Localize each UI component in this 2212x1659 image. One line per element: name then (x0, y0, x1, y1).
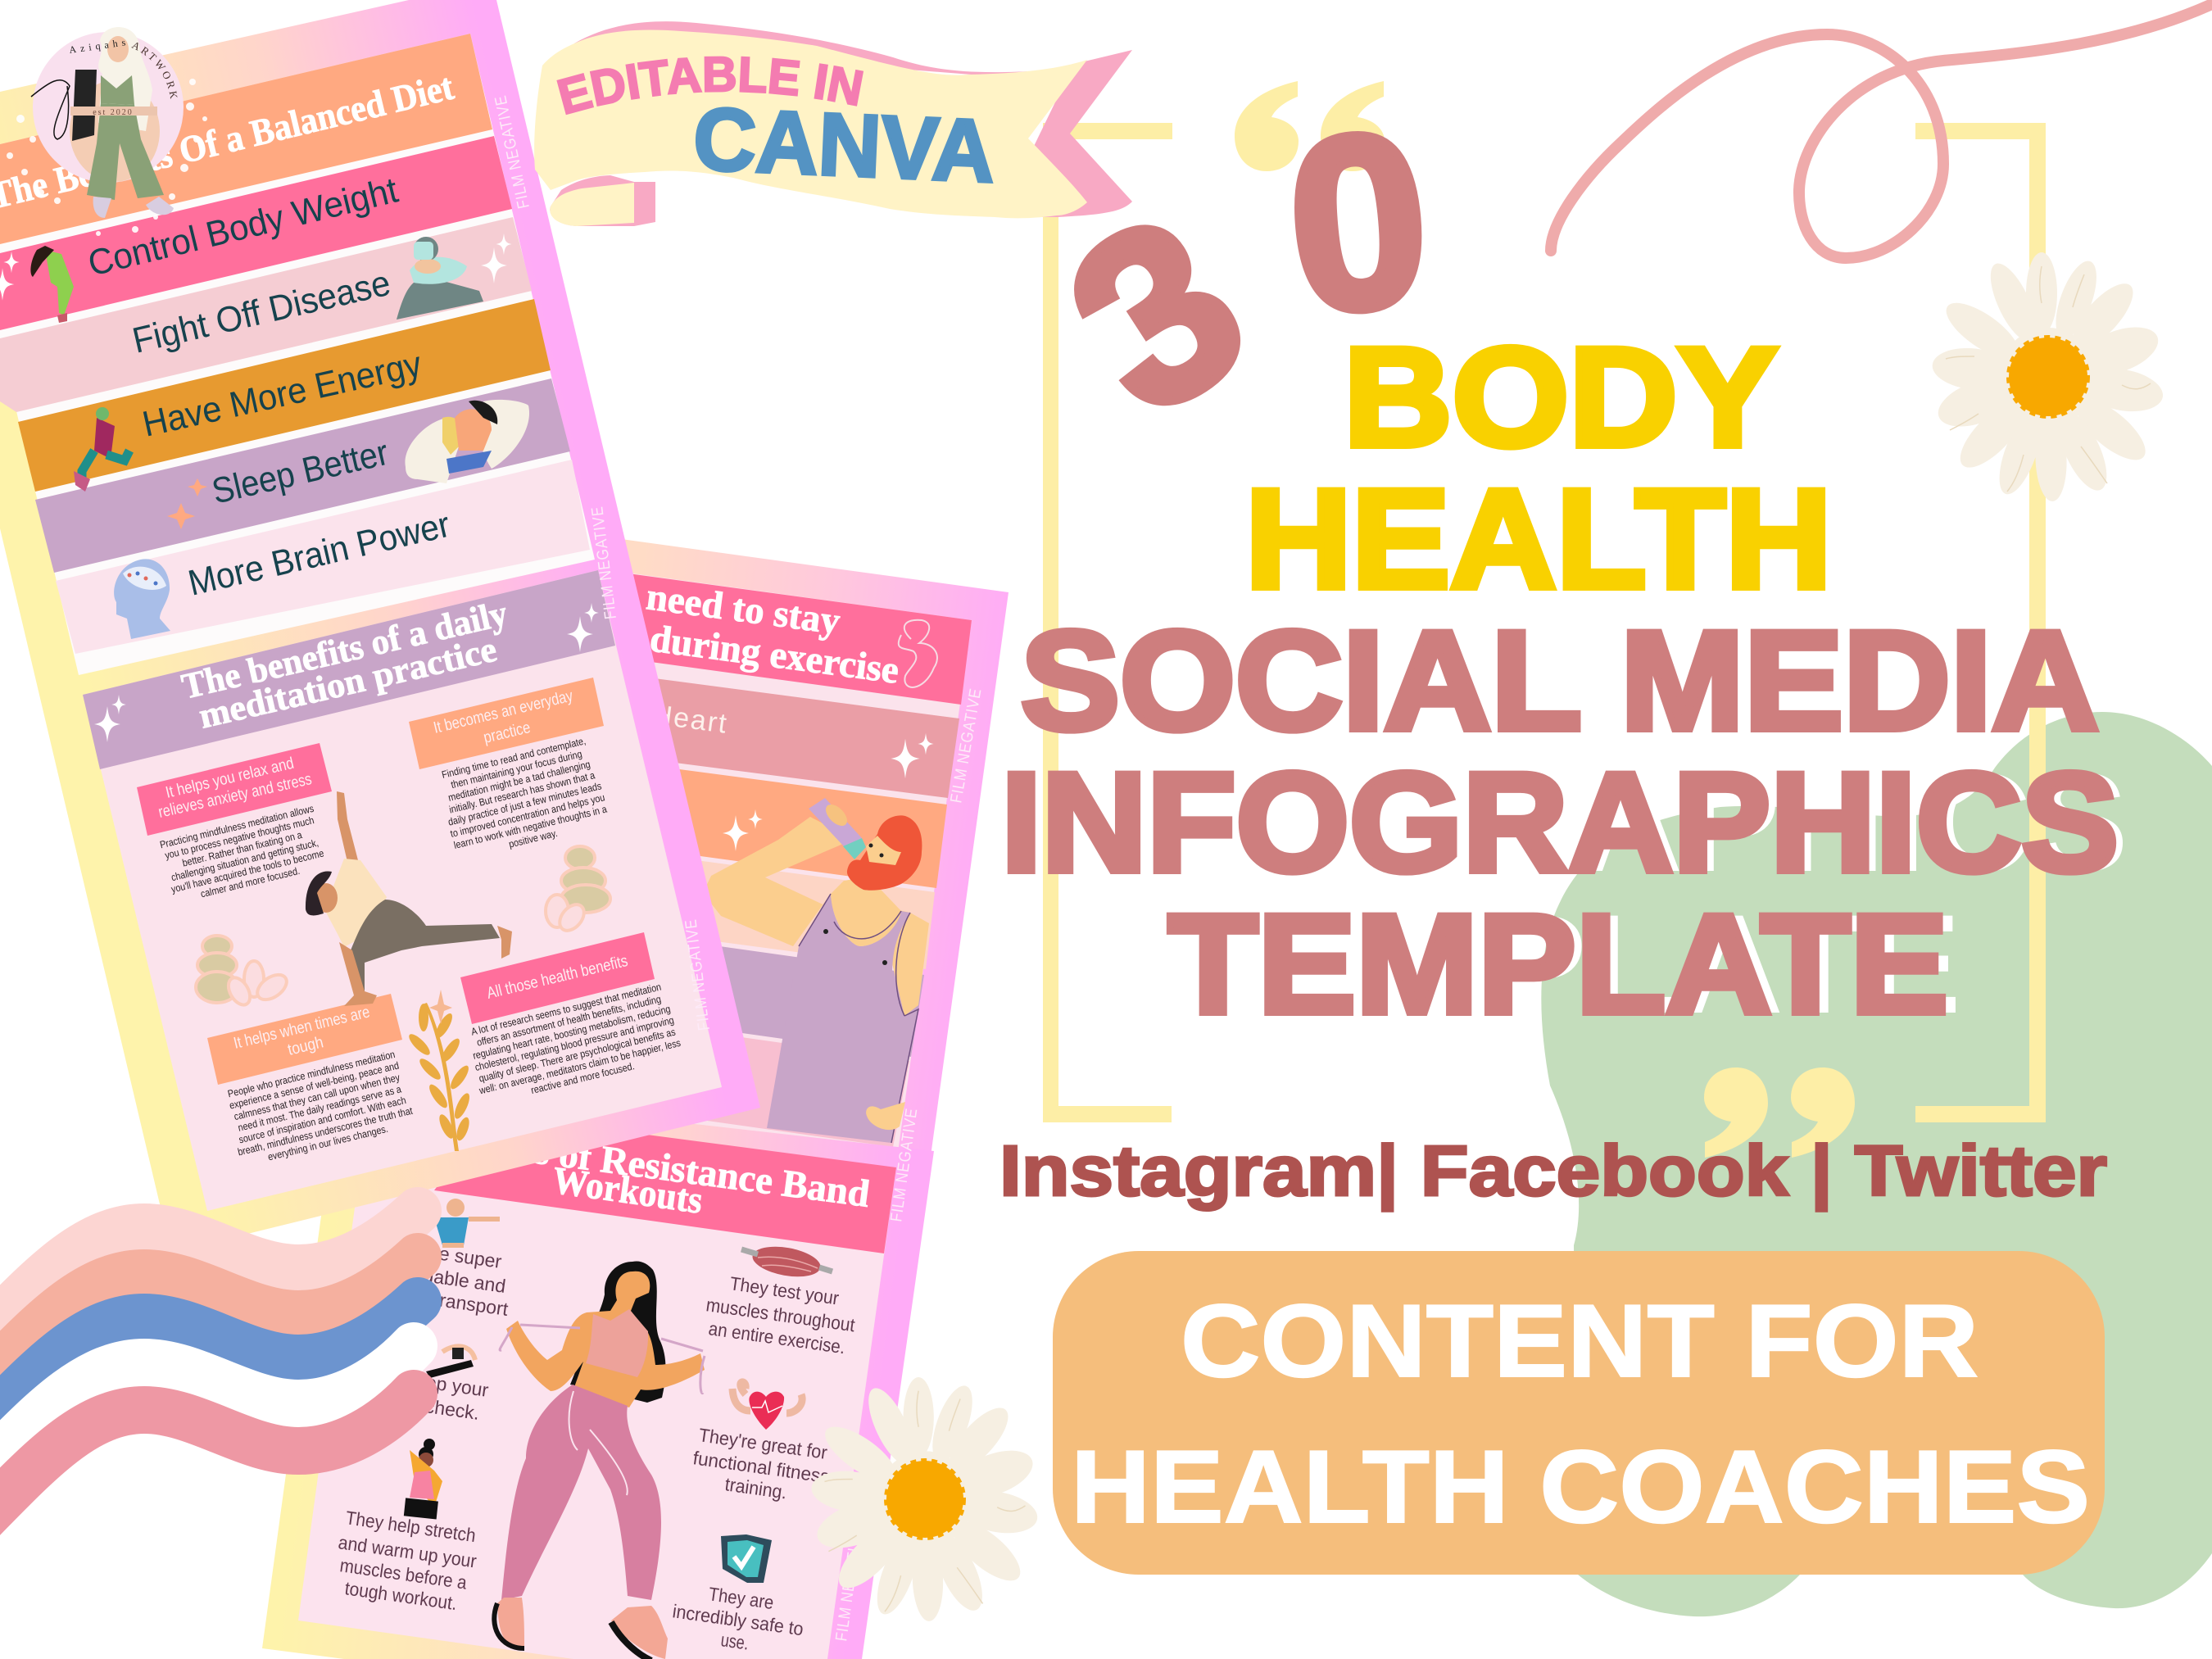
flower: right daisy (1930, 252, 2166, 502)
heading: need to stay hydrated (487, 555, 901, 692)
heading: benefits of daily meditation: The benefits of a daily (178, 593, 511, 707)
callout: relax and relieves: Practicing mindfulness meditation allows (159, 803, 315, 851)
callout: everyday practice: to improved concentration and helps you (449, 792, 606, 840)
text block: right benefits: training. (723, 1473, 788, 1503)
film negative labels: FILM NEGATIVE (492, 93, 533, 211)
illustration: man drinking water (703, 798, 929, 1143)
title: social media infographics template: TEMPLATE (1176, 886, 1961, 1043)
title: social media infographics template: TEMPLATE (1168, 886, 1948, 1043)
callout: when times are tough: everything in our lives changes. (267, 1123, 389, 1163)
callout: relax and relieves: calmer and more focused. (200, 865, 301, 900)
number: 30 (1024, 79, 1439, 466)
text block: left benefits: and warm up your (337, 1531, 478, 1572)
icon: blue exercising man (434, 1199, 500, 1245)
icon: girl with towel (404, 1439, 442, 1519)
icon: shield check (721, 1534, 772, 1583)
film negative labels (492, 93, 714, 1031)
callout: everyday practice (409, 678, 611, 863)
illustration: yoga woman (306, 791, 512, 1006)
callout: relax and relieves: challenging situation and getting stuck, (170, 837, 320, 883)
icon: running man (74, 407, 129, 492)
opening quotation marks (1235, 81, 1385, 171)
decoration: stones and lotus left (196, 936, 291, 1009)
flower: lower daisy (809, 1377, 1040, 1622)
band label: heart: Heart (650, 699, 730, 740)
text block: right benefits: use. (719, 1629, 750, 1654)
band: control body weight (0, 136, 512, 330)
title: body health: BODY (1344, 319, 1778, 476)
callout: everyday practice: daily practice of just a few minutes leads (447, 781, 603, 828)
callout: when times are tough: tough (286, 1033, 325, 1059)
title: body health: HEALTH (1245, 460, 1832, 618)
callout: when times are tough: source of inspiration and comfort. With each (238, 1095, 407, 1146)
callout: everyday practice: It becomes an everyday (432, 687, 574, 737)
callout: when times are tough: breath, mindfulness underscores the truth that (237, 1105, 415, 1158)
callout: everyday practice: then maintaining your focus during (450, 749, 583, 791)
text block: left benefits: form in check. (362, 1386, 481, 1424)
callout: when times are tough (207, 994, 417, 1170)
header band (434, 1114, 896, 1253)
callout: health benefits (460, 932, 685, 1108)
label: film negative: FILM NEGATIVE (887, 1107, 921, 1223)
text block: left benefits: muscles before a (338, 1554, 469, 1593)
sparkles on bands (0, 233, 512, 529)
text block: left benefits: They're super (387, 1235, 503, 1272)
icon: kidney outline (899, 620, 937, 687)
callout: everyday practice: Finding time to read and contemplate, (441, 736, 587, 781)
page: benefits of a balanced diet (0, 34, 595, 675)
callout: when times are tough: It helps when times are (232, 1003, 372, 1053)
text block: left benefits: They keep your (358, 1362, 490, 1401)
heading: benefits of a balanced diet: The Benefits Of a Balanced Diet (0, 66, 458, 217)
panel: benefits of resistance band workouts (262, 1084, 934, 1659)
header band (573, 566, 972, 705)
label: film negative: FILM NEGATIVE (947, 687, 986, 805)
callout: relax and relieves: you to process negative thoughts much (164, 814, 315, 862)
film negative labels: FILM NEGATIVE (588, 505, 620, 620)
band: more brain power (56, 460, 590, 654)
number: 30: 3 (1024, 161, 1289, 466)
topic bands (573, 668, 959, 1147)
text block: right benefits: incredibly safe to (671, 1600, 805, 1639)
green blob (1541, 712, 2212, 1616)
callout: when times are tough: experience a sense of well-being, peace and (229, 1060, 400, 1112)
text block: right benefits: an entire exercise. (707, 1317, 846, 1358)
text block: left benefits (337, 1235, 510, 1614)
band label: Sleep Better (208, 433, 392, 512)
callout: health benefits: reactive and more focused. (530, 1060, 636, 1096)
film negative labels: FILM NEGATIVE (682, 918, 714, 1031)
title: social media infographics template: SOCIAL MEDIA (1021, 602, 2099, 759)
icon: exercising woman in green (30, 246, 74, 323)
icon: sleeping person (405, 400, 529, 483)
band label: Fight Off Disease (129, 263, 394, 361)
panel: stay hydrated during exercise (487, 533, 1009, 1188)
sparkles (723, 733, 934, 851)
callout: everyday practice: practice (482, 718, 533, 747)
text block: right benefits: muscles throughout (705, 1294, 857, 1335)
callout: health benefits: regulating heart rate, boosting metabolism, reducing (472, 1004, 672, 1062)
heading: resistance band workouts: Benefits of Resistance Band (415, 1114, 872, 1216)
logo: artwork badge: Aziqahs (68, 36, 130, 56)
text block: right benefits: They're great for (697, 1424, 829, 1463)
decoration: wheat sprig (406, 1003, 473, 1151)
heading: resistance band workouts: Workouts (550, 1159, 705, 1222)
sparkles (94, 603, 599, 742)
text block: left benefits: They help stretch (344, 1507, 477, 1546)
text block: right benefits: functional fitness (691, 1447, 831, 1487)
callout: health benefits: A lot of research seems to suggest that meditation (470, 981, 663, 1038)
callout: health benefits: offers an assortment of health benefits, including (476, 994, 662, 1049)
logo: artwork badge (7, 27, 207, 236)
band label: More Brain Power (184, 505, 454, 604)
icon: muscle (741, 1242, 832, 1281)
heading: need to stay hydrated: hydrated during exercise (489, 596, 901, 692)
number: 30: 0 (1278, 79, 1439, 365)
text block: left benefits: easy to transport (368, 1279, 510, 1320)
callout: relax and relieves: relieves anxiety and stress (156, 770, 314, 822)
sparkle above wheat (429, 990, 452, 1024)
callout: health benefits: cholesterol, regulating blood pressure and improving (474, 1014, 675, 1073)
text block: left benefits: tough workout. (343, 1577, 459, 1614)
header band (83, 570, 615, 769)
band label: Control Body Weight (84, 170, 401, 284)
icon: brain head (114, 559, 170, 639)
callout pill: content for health coaches (1053, 1251, 2105, 1575)
band label: Have More Energy (139, 344, 425, 445)
icon: heart with arms (732, 1382, 802, 1430)
callout: everyday practice: initially. But research has shown that a (448, 769, 596, 816)
text block: right benefits: They are (707, 1583, 775, 1613)
title: social media infographics template: INFOGRAPHICS (1011, 744, 2128, 901)
callout: when times are tough: need it most. The daily readings serve as a (237, 1084, 403, 1134)
band: have more energy (18, 299, 551, 492)
callout: when times are tough: People who practice mindfulness meditation (227, 1049, 397, 1100)
title: social media infographics template (1001, 602, 2128, 1043)
icon: dumbbell (426, 1346, 475, 1378)
label: canva: CANVA (691, 88, 997, 201)
heading: benefits of daily meditation: meditation practice (195, 629, 501, 737)
pink squiggle line (1551, 4, 2212, 258)
title: social media infographics template: INFOGRAPHICS (1001, 744, 2119, 901)
band: title orange (0, 34, 492, 244)
callout: relax and relieves: better. Rather than fixating on a (181, 829, 304, 869)
subtitle: platforms: Instagram| Facebook | Twitter (999, 1131, 2107, 1212)
callout: when times are tough: calmness that they can call upon when they (233, 1072, 401, 1122)
decoration: stones and lotus right (546, 846, 610, 936)
text block: right benefits (671, 1272, 857, 1654)
callout: relax and relieves (137, 743, 332, 907)
band: sleep better (35, 378, 570, 573)
title: body health (1245, 319, 1832, 618)
illustration: woman with resistance band (494, 1261, 705, 1659)
text block: right benefits: They test your (728, 1272, 841, 1309)
logo: artwork badge: est 2020 (93, 108, 134, 117)
callout: health benefits: well: on average, meditators claim to be happier, less (478, 1037, 682, 1097)
callout: health benefits: All those health benefits (485, 952, 629, 1003)
callout pill: content for health coaches: HEALTH COACHES (1071, 1429, 2090, 1544)
panel: balanced diet and meditation pages (0, 0, 760, 1253)
label: film negative lower: FILM NEGATIVE (832, 1526, 866, 1643)
callout: everyday practice: positive way. (508, 827, 559, 850)
yellow bracket frame (1043, 123, 2046, 1122)
label: editable in: EDITABLE IN (556, 56, 863, 115)
closing quotation marks (1704, 1067, 1855, 1158)
callout: relax and relieves: you'll have acquired the tools to become (170, 848, 325, 895)
band: fight off disease (0, 217, 532, 412)
page: meditation benefits (83, 570, 722, 1211)
heading: need to stay hydrated: Why you need to stay (487, 555, 843, 643)
callout: everyday practice: meditation might be a tad challenging (447, 759, 592, 804)
callout: everyday practice: learn to work with negative thoughts in a (453, 804, 609, 851)
icon: sick man (397, 237, 483, 320)
logo: artwork badge: ARTWORK (131, 43, 177, 99)
callout pill: content for health coaches: CONTENT FOR (1181, 1283, 1979, 1398)
callout: health benefits: quality of sleep. There are psychological benefits as (478, 1027, 677, 1085)
text block: left benefits: foldable and (402, 1262, 507, 1297)
ribbon banner: editable in canva (534, 21, 1132, 226)
callout: relax and relieves: It helps you relax and (164, 755, 296, 802)
wavy ribbons (0, 1211, 418, 1534)
